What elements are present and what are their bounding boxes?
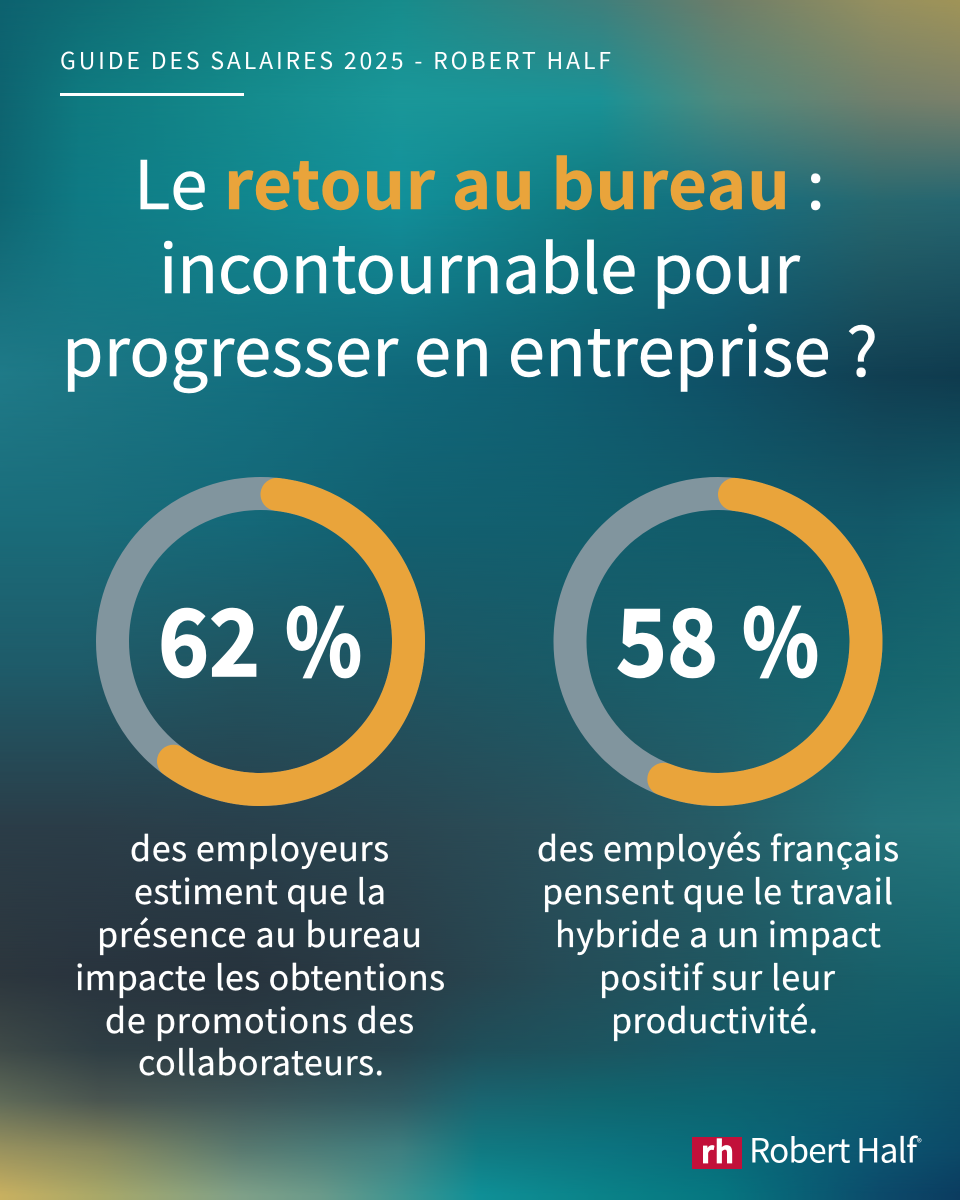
description: employees: pensent que le travail: [542, 865, 893, 914]
description: employers: des employeurs: [130, 822, 389, 871]
description: employers: collaborateurs.: [138, 1036, 384, 1085]
title: [62, 132, 878, 396]
description: employers: [75, 822, 445, 1085]
logo: Robert Half: rh: [701, 1128, 734, 1172]
title: Le retour au bureau :: [134, 132, 825, 229]
description: employees: [537, 822, 899, 1043]
donut chart: 58 %: 58: [616, 569, 718, 703]
donut chart: 58 %: [570, 494, 866, 790]
description: employees: des employés français: [537, 822, 899, 871]
description: employers: impacte les obtentions: [75, 951, 445, 1000]
header label: GUIDE DES SALAIRES 2025 - ROBERT HALF: [60, 42, 611, 76]
header label: [60, 42, 611, 96]
donut chart: 58 %: %: [742, 569, 819, 703]
logo: Robert Half: Robert Half: [749, 1124, 918, 1172]
description: employees: positif sur leur: [599, 951, 836, 1000]
donut chart: 62 %: 62: [158, 569, 260, 703]
description: employees: productivité.: [611, 994, 818, 1043]
description: employers: de promotions des: [105, 994, 414, 1043]
title: incontournable pour: [159, 216, 801, 313]
description: employers: estiment que la: [134, 865, 386, 914]
description: employees: hybride a un impact: [555, 908, 881, 957]
donut chart: 62 %: [112, 494, 409, 790]
donut chart: 62 %: %: [285, 569, 362, 703]
logo: Robert Half: ®: [917, 1134, 922, 1149]
description: employers: présence au bureau: [97, 908, 422, 957]
title: progresser en entreprise ?: [62, 299, 878, 396]
